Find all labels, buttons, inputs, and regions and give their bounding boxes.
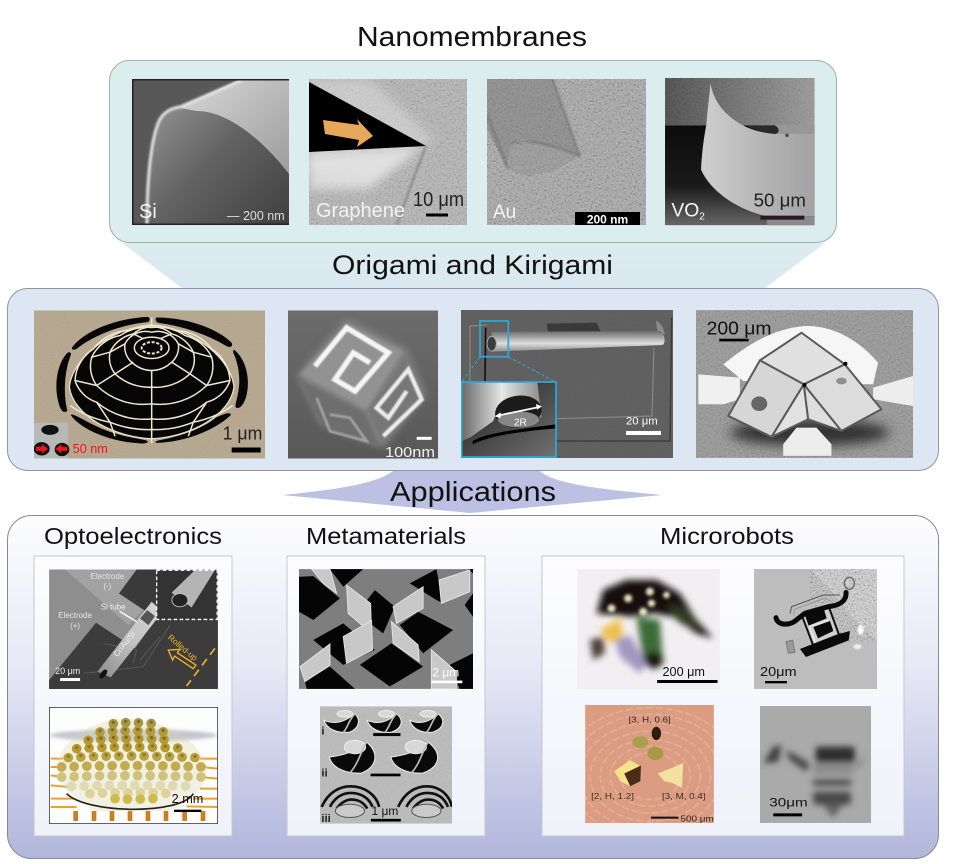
title: Nanomembranes: Nanomembranes bbox=[357, 21, 587, 52]
image: kirigami rose bbox=[34, 310, 265, 458]
image: rolled-up Si tube device: Rolled-up bbox=[166, 632, 200, 663]
image: metamaterial folded flaps bbox=[299, 569, 473, 689]
heading: Microrobots: Microrobots bbox=[660, 523, 794, 549]
image: rolled-up Si tube device: Si tube bbox=[101, 602, 126, 611]
connector: applications lens arrow bbox=[282, 471, 662, 513]
image: metamaterial rose arrays: i bbox=[321, 725, 324, 737]
image: Si nanomembrane: Si bbox=[139, 201, 157, 223]
panel: origami and kirigami bbox=[8, 288, 938, 470]
image: colourful microrobot: 200 μm bbox=[662, 665, 705, 679]
image: kirigami rose: 1 μm bbox=[223, 422, 262, 444]
image: VO2 nanomembrane: 2 bbox=[699, 212, 705, 223]
image: origami dome bbox=[696, 310, 913, 458]
heading: Origami and Kirigami: Origami and Kirigami bbox=[332, 250, 613, 280]
inset: tube diameter 2R bbox=[462, 382, 556, 457]
image: Graphene nanomembrane: Graphene bbox=[316, 200, 405, 222]
heading: Applications: Applications bbox=[390, 476, 556, 507]
image: rolled-up Si tube device: Electrode bbox=[58, 611, 92, 620]
inset: tube diameter 2R: 2R bbox=[514, 417, 527, 428]
image: metamaterial rose arrays: 1 μm bbox=[372, 804, 398, 818]
image: metamaterial folded flaps: 2 μm bbox=[432, 666, 459, 680]
connector: nanomembranes to origami trapezoid bbox=[122, 243, 825, 288]
image: robots on fingertip: 500 μm bbox=[680, 813, 714, 823]
image: metamaterial rose arrays: ii bbox=[321, 767, 328, 779]
image: rolled-up tube with inset bbox=[461, 310, 673, 458]
image: origami cube: 100nm bbox=[385, 445, 435, 461]
image: rolled-up Si tube device bbox=[49, 570, 218, 689]
image: rolled-up Si tube device: 20 μm bbox=[55, 666, 80, 676]
image: origami dome: 200 μm bbox=[707, 317, 772, 338]
image: Graphene nanomembrane bbox=[309, 79, 467, 225]
image: colourful microrobot bbox=[577, 569, 720, 689]
image: Si nanomembrane bbox=[132, 79, 289, 225]
image: hemispherical camera array: 2 mm bbox=[172, 792, 203, 806]
image: robots on fingertip bbox=[585, 705, 714, 823]
image: origami cube bbox=[288, 310, 438, 461]
image: rolled-up Si tube device: Electrode bbox=[91, 572, 125, 581]
image: rolled-up tube with inset: 20 μm bbox=[626, 415, 658, 427]
image: rolled-up Si tube device: (+) bbox=[70, 622, 80, 631]
image: kirigami rose: 50 nm bbox=[73, 442, 108, 456]
image: Au nanomembrane: Au bbox=[493, 202, 516, 223]
panel: metamaterials images bbox=[287, 556, 485, 836]
image: jumping microrobot: 20μm bbox=[760, 665, 797, 679]
image: VO2 nanomembrane bbox=[665, 78, 815, 226]
panel: applications bbox=[8, 516, 938, 858]
image: robots on fingertip: [3, M, 0.4] bbox=[662, 791, 705, 801]
panel: nanomembranes bbox=[110, 60, 836, 242]
image: rolled-up Si tube device: (-) bbox=[103, 582, 112, 591]
image: jumping microrobot bbox=[754, 569, 877, 689]
image: rolled-up Si tube device: Cr/Au/Si bbox=[112, 630, 137, 659]
image: metamaterial rose arrays: iii bbox=[321, 813, 331, 825]
heading: Metamaterials: Metamaterials bbox=[306, 523, 466, 549]
panel: microrobots images bbox=[542, 556, 904, 845]
image: Au nanomembrane bbox=[487, 79, 646, 226]
image: bee-like microrobot: 30μm bbox=[769, 795, 808, 809]
image: Si nanomembrane: — 200 nm bbox=[227, 209, 285, 223]
panel: optoelectronics images bbox=[34, 556, 232, 836]
image: hemispherical camera array bbox=[49, 707, 218, 824]
image: VO2 nanomembrane: 50 μm bbox=[754, 189, 806, 210]
image: metamaterial rose arrays bbox=[320, 706, 452, 825]
image: VO2 nanomembrane: VO bbox=[671, 200, 699, 221]
image: robots on fingertip: [2, H, 1.2] bbox=[591, 791, 634, 801]
image: Au nanomembrane: 200 nm bbox=[587, 212, 628, 226]
image: bee-like microrobot bbox=[760, 706, 871, 823]
heading: Optoelectronics: Optoelectronics bbox=[44, 523, 222, 549]
image: robots on fingertip: [3, H, 0.6] bbox=[629, 715, 671, 725]
inset: 50 nm gap bbox=[34, 423, 69, 458]
